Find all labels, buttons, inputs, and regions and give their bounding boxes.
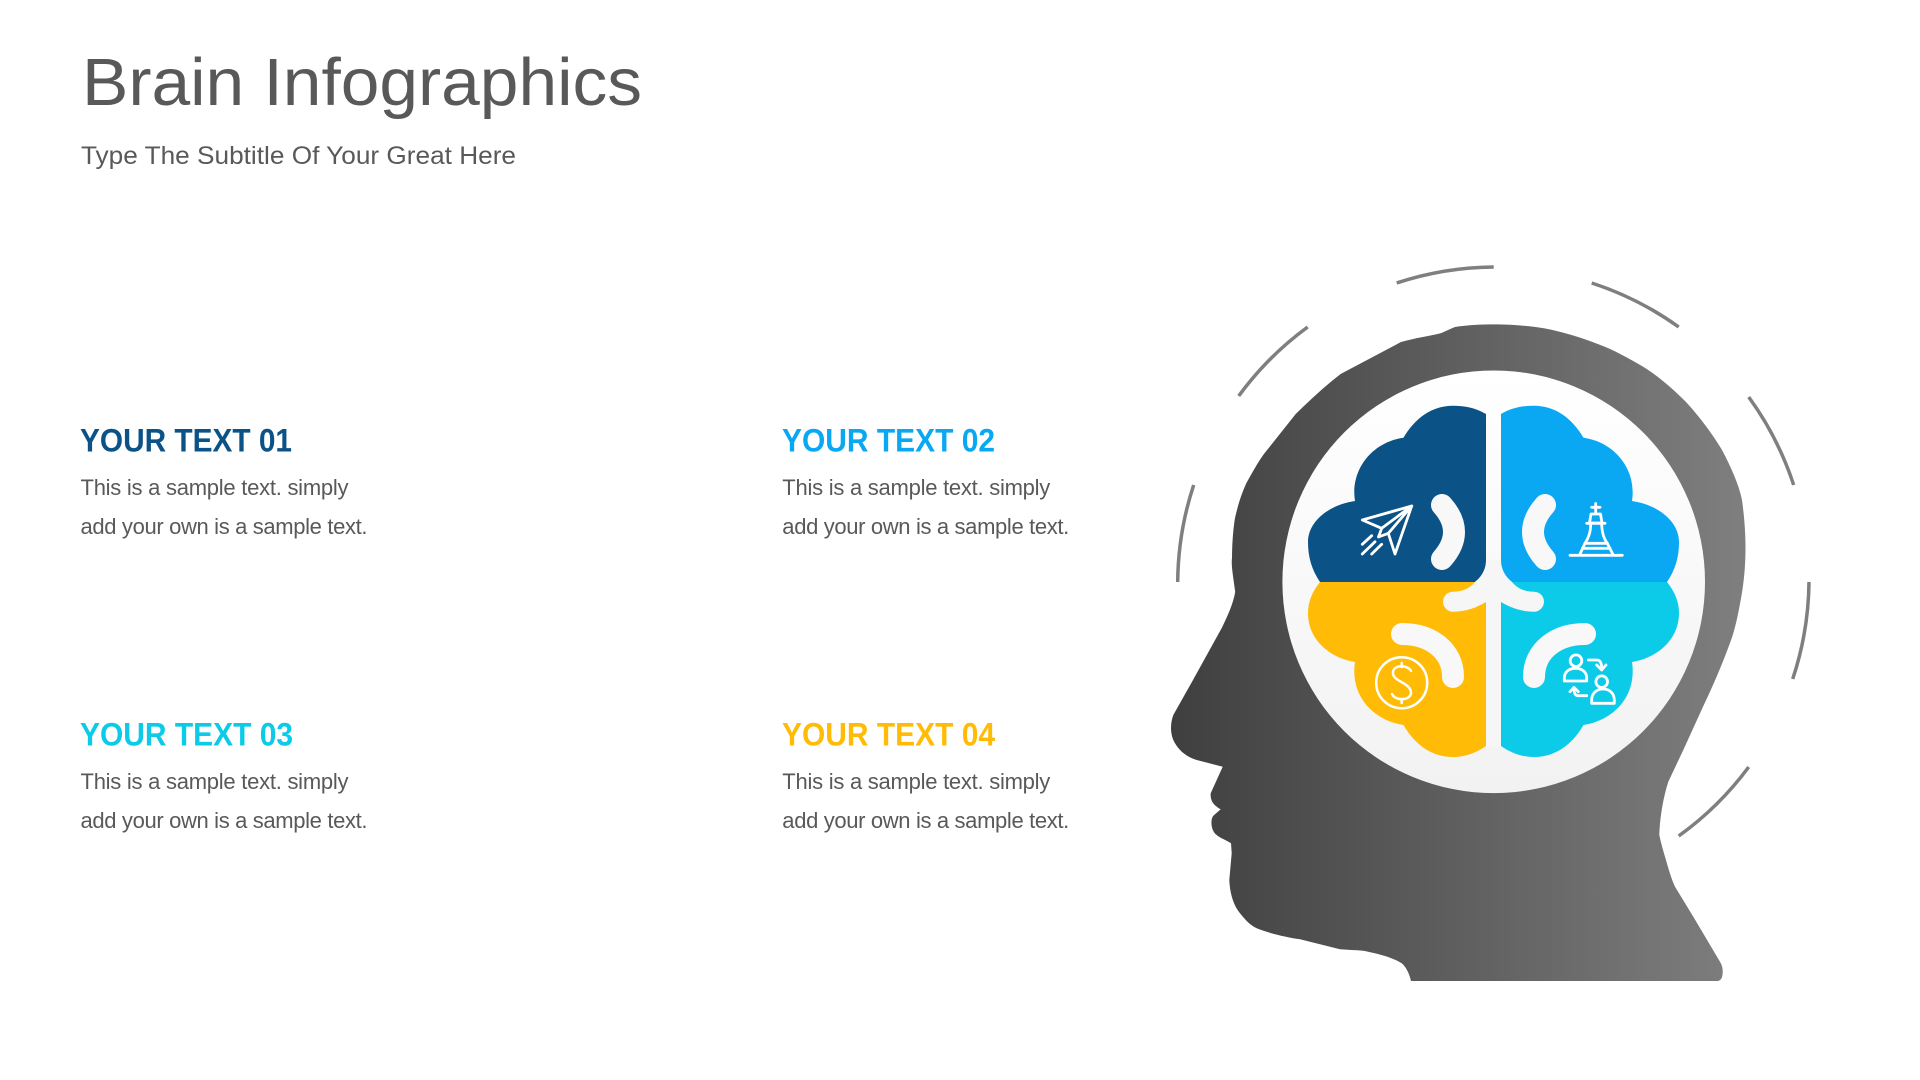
brain lobe: blue <box>1501 406 1679 582</box>
body 04: This is a sample text. simply <box>782 769 1050 794</box>
body 03: This is a sample text. simply <box>80 769 348 794</box>
body 03 <box>80 769 368 833</box>
brain lobe: yellow <box>1308 582 1486 757</box>
body 04 <box>782 769 1069 833</box>
body 01: add your own is a sample text. <box>80 514 368 539</box>
text block 03 <box>80 716 368 833</box>
dashed arcs around head <box>1178 267 1809 836</box>
heading 02: YOUR TEXT 02 <box>782 422 995 458</box>
heading 04: YOUR TEXT 04 <box>782 716 995 752</box>
body 01: This is a sample text. simply <box>80 475 348 500</box>
brain lobe: navy <box>1308 406 1486 582</box>
head silhouette <box>1171 324 1746 981</box>
body 04: add your own is a sample text. <box>782 808 1069 833</box>
subtitle: Type The Subtitle Of Your Great Here <box>81 142 516 170</box>
text block 01 <box>80 422 368 539</box>
text block 04 <box>782 716 1069 833</box>
icon: people exchange <box>1564 655 1614 703</box>
icon: paper plane <box>1362 506 1412 554</box>
icon: chess king <box>1570 504 1622 555</box>
body 02 <box>782 475 1069 539</box>
brain lobe: cyan <box>1501 582 1679 757</box>
body 02: This is a sample text. simply <box>782 475 1050 500</box>
brain folds <box>1402 505 1585 746</box>
heading 01: YOUR TEXT 01 <box>80 422 292 458</box>
body 03: add your own is a sample text. <box>80 808 368 833</box>
text block 02 <box>782 422 1069 539</box>
brain background circle <box>1282 370 1705 793</box>
title: Brain Infographics <box>82 45 642 120</box>
body 01 <box>80 475 368 539</box>
icon: dollar coin <box>1376 657 1427 708</box>
heading 03: YOUR TEXT 03 <box>80 716 293 752</box>
body 02: add your own is a sample text. <box>782 514 1069 539</box>
